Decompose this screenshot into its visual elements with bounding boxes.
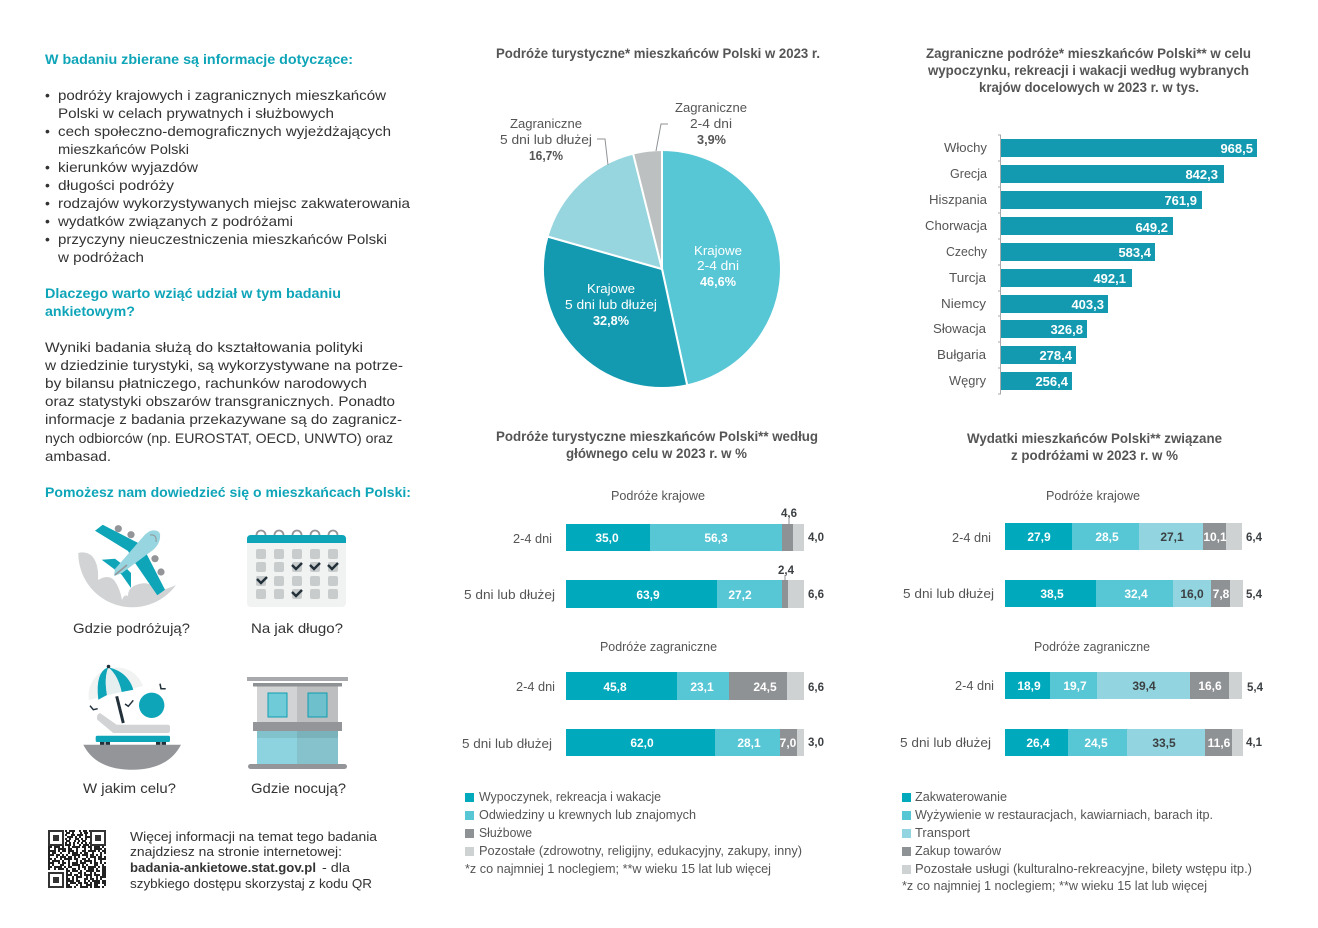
heading: why participate: Dlaczego warto wziąć udział w tym badaniu [45,285,341,301]
legend: expense types: Zakup towarów [915,843,1002,858]
legend: trip purpose [465,789,802,876]
icon: hotel building [247,677,348,769]
title: trips by purpose [496,428,818,461]
label: what purpose: W jakim celu? [83,780,176,796]
stacked bar chart: trips by purpose: Podróże krajowe [611,488,705,503]
text block: more information: - dla [322,860,351,875]
bar chart: destination countries: 968,5 [1220,141,1253,156]
stacked bar chart: trips by purpose: 7,0 [780,736,797,750]
title: expenses: Wydatki mieszkańców Polski** związane [967,430,1222,446]
bar chart: destination countries: 278,4 [1039,348,1073,363]
title: destinations [926,45,1251,95]
bar chart: destination countries: Węgry [949,373,986,388]
bullet list: survey topics: • [45,159,50,175]
title: destinations: krajów docelowych w 2023 r. w tys. [979,79,1199,95]
stacked bar chart: trips by purpose: 35,0 [595,531,619,545]
stacked bar chart: expenses: 7,8 [1213,587,1230,601]
pie chart: tourist trips [500,100,781,388]
pie chart: tourist trips: Zagraniczne [675,100,747,115]
title: destinations: Zagraniczne podróże* mieszkańców Polski** w celu [926,45,1251,61]
heading: why participate [45,285,341,319]
bar chart: destination countries: Turcja [949,270,987,285]
bar chart: destination countries: 761,9 [1164,193,1197,208]
text block: survey purpose: nych odbiorców (np. EUROSTAT, OECD, UNWTO) oraz [45,430,393,446]
stacked bar chart: expenses: 5 dni lub dłużej [903,586,994,601]
stacked bar chart: expenses: 28,5 [1095,530,1119,544]
stacked bar chart: expenses: 10,1 [1203,530,1227,544]
stacked bar chart: expenses: 6,4 [1246,532,1263,544]
pie chart: tourist trips: 2-4 dni [690,116,732,131]
bar chart: destination countries: Włochy [944,140,987,155]
pie chart: tourist trips: Zagraniczne [510,116,582,131]
bar chart: destination countries [925,135,1257,394]
stacked bar chart: expenses [900,488,1264,756]
text block: more information [130,829,378,891]
bullet list: survey topics: w podróżach [57,249,144,265]
label: where they stay: Gdzie nocują? [251,780,346,796]
stacked bar chart: expenses: 27,1 [1160,530,1184,544]
title: expenses: z podróżami w 2023 r. w % [1011,447,1179,463]
bar chart: destination countries: Grecja [950,166,988,181]
bullet list: survey topics: długości podróży [58,177,174,193]
text block: survey purpose: Wyniki badania służą do kształtowania polityki [45,339,363,355]
text block: survey purpose: by bilansu płatniczego, rachunków narodowych [45,375,367,391]
stacked bar chart: trips by purpose: 5 dni lub dłużej [464,587,555,602]
pie chart: tourist trips: Krajowe [694,243,742,258]
stacked bar chart: expenses: 4,1 [1246,737,1263,749]
bullet list: survey topics: • [45,87,50,103]
stacked bar chart: expenses: 5,4 [1247,682,1264,694]
heading: collected information: W badaniu zbierane są informacje dotyczące: [45,51,353,67]
stacked bar chart: expenses: 33,5 [1152,736,1176,750]
title: expenses [967,430,1222,463]
title: trips by purpose: Podróże turystyczne mieszkańców Polski** według [496,428,818,444]
bar chart: destination countries: 649,2 [1135,220,1168,235]
stacked bar chart: expenses: 27,9 [1027,530,1051,544]
text block: more information: znajdziesz na stronie internetowej: [130,844,342,859]
text block: more information: Więcej informacji na temat tego badania [130,829,378,844]
stacked bar chart: trips by purpose: 5 dni lub dłużej [462,736,552,751]
bar chart: destination countries: Chorwacja [925,218,988,233]
pie chart: tourist trips: 32,8% [593,313,629,328]
bar chart: destination countries: 403,3 [1071,297,1104,312]
stacked bar chart: trips by purpose: 4,0 [808,532,824,544]
bullet list: survey topics: rodzajów wykorzystywanych miejsc zakwaterowania [58,195,410,211]
stacked bar chart: trips by purpose: 6,6 [808,589,824,601]
bullet list: survey topics: podróży krajowych i zagranicznych mieszkańców [58,87,387,103]
bullet list: survey topics: wydatków związanych z podróżami [57,213,293,229]
stacked bar chart: trips by purpose: 2-4 dni [516,679,555,694]
pie chart: tourist trips: 5 dni lub dłużej [565,297,657,312]
icon: calendar [247,530,346,607]
title: destinations: wypoczynku, rekreacji i wakacji według wybranych [927,62,1249,78]
text block: more information: szybkiego dostępu skorzystaj z kodu QR [130,876,372,891]
stacked bar chart: expenses: 16,0 [1180,587,1204,601]
bullet list: survey topics: • [45,195,50,211]
stacked bar chart: expenses: 16,6 [1198,679,1222,693]
bullet list: survey topics: • [45,123,50,139]
label: how long: Na jak długo? [251,620,343,636]
legend: expense types: Zakwaterowanie [915,789,1007,804]
stacked bar chart: trips by purpose: 3,0 [808,737,824,749]
stacked bar chart: trips by purpose: 62,0 [630,736,654,750]
bullet list: survey topics: cech społeczno-demograficznych wyjeżdżających [58,123,391,139]
stacked bar chart: trips by purpose: 2,4 [778,565,795,577]
stacked bar chart: trips by purpose: 63,9 [636,588,660,602]
bullet list: survey topics: • [45,177,50,193]
stacked bar chart: trips by purpose: 56,3 [704,531,728,545]
label: where they travel: Gdzie podróżują? [73,620,190,636]
pie chart: tourist trips: 5 dni lub dłużej [500,132,592,147]
pie chart: tourist trips: 2-4 dni [697,258,739,273]
stacked bar chart: expenses: Podróże zagraniczne [1034,639,1150,654]
bar chart: destination countries: 326,8 [1050,322,1083,337]
text block: survey purpose [44,339,403,464]
stacked bar chart: expenses: 39,4 [1132,679,1156,693]
stacked bar chart: expenses: 2-4 dni [952,530,991,545]
stacked bar chart: expenses: 26,4 [1026,736,1050,750]
stacked bar chart: expenses: 32,4 [1124,587,1148,601]
text block: survey purpose: oraz statystyki obszarów transgranicznych. Ponadto [45,393,395,409]
title: tourist trips: Podróże turystyczne* mieszkańców Polski w 2023 r. [496,45,820,61]
pie chart: tourist trips: 3,9% [697,132,726,147]
heading: why participate: ankietowym? [45,303,135,319]
stacked bar chart: expenses: 18,9 [1017,679,1041,693]
bullet list: survey topics: • [45,231,50,247]
bullet list: survey topics: • [45,213,50,229]
bar chart: destination countries: 583,4 [1118,245,1152,260]
bullet list: survey topics: Polski w celach prywatnych i służbowych [58,105,334,121]
stacked bar chart: expenses: 38,5 [1040,587,1064,601]
stacked bar chart: trips by purpose: 28,1 [737,736,761,750]
title: trips by purpose: głównego celu w 2023 r. w % [566,445,748,461]
bar chart: destination countries: Słowacja [933,321,987,336]
legend: expense types: Transport [915,825,970,840]
stacked bar chart: trips by purpose: 4,6 [781,508,797,520]
stacked bar chart: trips by purpose: 45,8 [603,680,627,694]
bullet list: survey topics: przyczyny nieuczestniczenia mieszkańców Polski [58,231,387,247]
legend: expense types: Wyżywienie w restauracjach, kawiarniach, barach itp. [915,807,1213,822]
stacked bar chart: trips by purpose: 27,2 [728,588,752,602]
legend: trip purpose: Pozostałe (zdrowotny, religijny, edukacyjny, zakupy, inny) [479,843,802,858]
legend: expense types [902,789,1252,893]
stacked bar chart: expenses: 5 dni lub dłużej [900,735,991,750]
bar chart: destination countries: Czechy [946,244,987,259]
stacked bar chart: expenses: 19,7 [1063,679,1087,693]
legend: trip purpose: Służbowe [479,825,532,840]
stacked bar chart: expenses: 5,4 [1246,589,1263,601]
stacked bar chart: trips by purpose: 2-4 dni [513,531,552,546]
stacked bar chart: trips by purpose [462,488,824,756]
legend: trip purpose: *z co najmniej 1 noclegiem; **w wieku 15 lat lub więcej [465,861,771,876]
icon: beach umbrella and lounger [83,665,181,770]
bullet list: survey topics: mieszkańców Polski [58,141,189,157]
bar chart: destination countries: Bułgaria [937,347,987,362]
bullet list: survey topics [45,87,410,265]
pie chart: tourist trips: 16,7% [529,148,563,163]
bar chart: destination countries: Niemcy [941,296,987,311]
bar chart: destination countries: 842,3 [1185,167,1218,182]
stacked bar chart: expenses: 24,5 [1084,736,1108,750]
pie chart: tourist trips: 46,6% [700,274,736,289]
stacked bar chart: expenses: Podróże krajowe [1046,488,1140,503]
bar chart: destination countries: 492,1 [1093,271,1126,286]
legend: trip purpose: Wypoczynek, rekreacja i wakacje [479,789,661,804]
heading: you will help us: Pomożesz nam dowiedzieć się o mieszkańcach Polski: [45,484,411,500]
legend: expense types: Pozostałe usługi (kulturalno-rekreacyjne, bilety wstępu itp.) [915,861,1252,876]
bar chart: destination countries: Hiszpania [929,192,988,207]
stacked bar chart: trips by purpose: Podróże zagraniczne [600,639,717,654]
QR code [48,831,106,887]
bullet list: survey topics: kierunków wyjazdów [58,159,199,175]
bar chart: destination countries: 256,4 [1035,374,1069,389]
legend: expense types: *z co najmniej 1 noclegiem; **w wieku 15 lat lub więcej [902,878,1207,893]
stacked bar chart: expenses: 11,6 [1208,736,1231,750]
text block: survey purpose: ambasad. [45,448,111,464]
stacked bar chart: trips by purpose: 23,1 [690,680,714,694]
legend: trip purpose: Odwiedziny u krewnych lub znajomych [479,807,696,822]
text block: survey purpose: informacje z badania przekazywane są do zagranicz- [45,411,402,427]
text block: more information: badania-ankietowe.stat.gov.pl [130,860,316,875]
icon: airplane over clouds [78,525,176,607]
text block: survey purpose: w dziedzinie turystyki, są wykorzystywane na potrze- [44,357,403,373]
stacked bar chart: trips by purpose: 24,5 [753,680,777,694]
stacked bar chart: trips by purpose: 6,6 [808,682,824,694]
pie chart: tourist trips: Krajowe [587,281,635,296]
stacked bar chart: expenses: 2-4 dni [955,678,994,693]
